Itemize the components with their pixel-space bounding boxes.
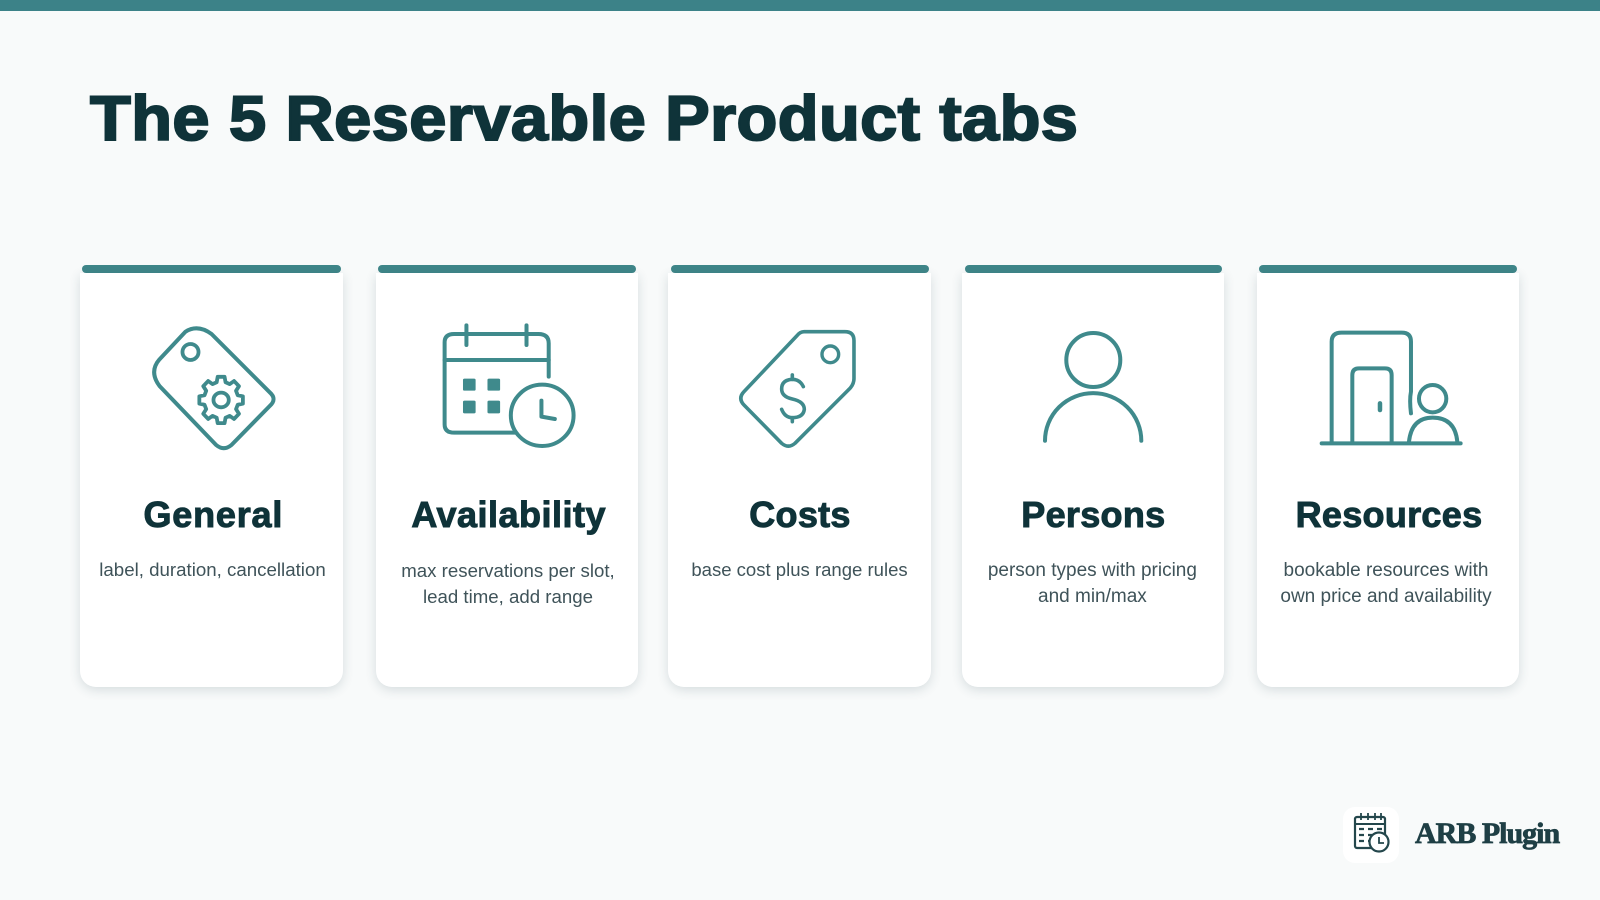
description: Availability: lead time, add range — [423, 586, 593, 606]
heading: Resources: Resources — [1296, 494, 1482, 535]
logo: calendar badge — [1343, 807, 1399, 863]
card accent bar: Persons — [965, 265, 1222, 273]
panel: Availability — [376, 273, 638, 687]
panel: Persons — [962, 273, 1224, 687]
card accent bar: General — [82, 265, 341, 273]
icon: price tag with dollar — [738, 330, 856, 448]
panel: Resources — [1257, 273, 1519, 687]
description: Availability: max reservations per slot, — [401, 560, 615, 580]
description: Persons — [988, 560, 1197, 607]
heading: Costs: Costs — [749, 494, 851, 535]
heading: Availability: Availability — [411, 494, 606, 535]
panel: Costs — [668, 273, 931, 687]
card accent bar: Resources — [1259, 265, 1517, 273]
description: General: label, duration, cancellation — [99, 559, 326, 580]
panel: General — [80, 273, 343, 687]
icon: calendar with clock — [442, 323, 576, 448]
title: The 5 Reservable Product tabs — [90, 84, 1078, 154]
description: Costs: base cost plus range rules — [691, 559, 908, 580]
description: Availability — [401, 560, 615, 607]
description: Resources — [1280, 560, 1492, 607]
description: Persons: and min/max — [1038, 586, 1147, 607]
description: Persons: person types with pricing — [988, 560, 1197, 581]
description: Resources: own price and availability — [1280, 586, 1492, 607]
top band — [0, 0, 1600, 11]
card accent bar: Availability — [378, 265, 636, 273]
description: Resources: bookable resources with — [1284, 560, 1488, 581]
card accent bar: Costs — [671, 265, 929, 273]
icon: person — [1043, 331, 1144, 443]
icon: calendar with clock — [1354, 813, 1390, 853]
heading: General: General — [143, 494, 283, 535]
icon: door with person — [1320, 330, 1463, 446]
icon: tag with gear — [152, 326, 276, 450]
heading: Persons: Persons — [1021, 494, 1165, 535]
logo wordmark: ARB Plugin — [1415, 817, 1559, 850]
